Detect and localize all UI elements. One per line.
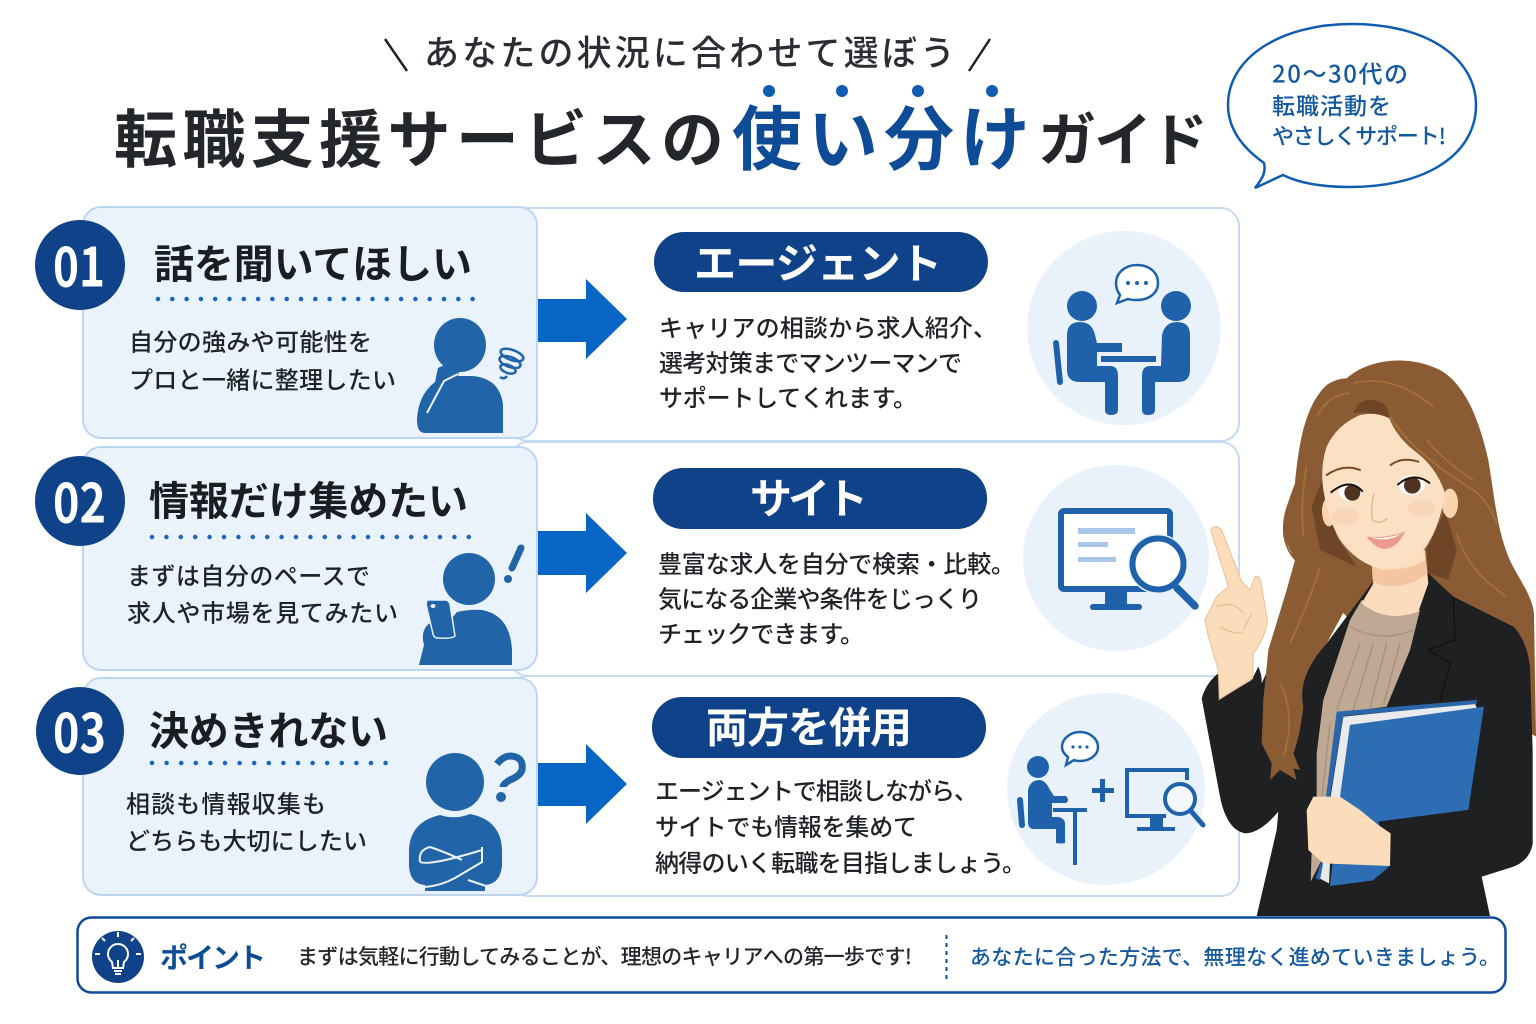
number badge 03 bbox=[36, 687, 124, 775]
holding hand bbox=[1307, 797, 1391, 866]
speech bubble bbox=[1228, 24, 1476, 188]
description bbox=[655, 778, 1026, 878]
hair left strand bbox=[1262, 483, 1373, 780]
icon: person with question mark bbox=[409, 753, 522, 891]
description: 求人や市場を見てみたい bbox=[127, 600, 398, 628]
heading: 情報だけ集めたい bbox=[149, 480, 468, 524]
description: 気になる企業や条件をじっくり bbox=[658, 586, 982, 614]
description bbox=[659, 316, 997, 412]
pointing hand bbox=[1205, 527, 1267, 699]
pill bbox=[654, 232, 988, 292]
speech bubble: 20～30代の bbox=[1272, 54, 1408, 90]
facial features bbox=[1327, 460, 1436, 549]
title: 転職支援サービスの bbox=[114, 106, 724, 176]
neck bbox=[1362, 550, 1428, 616]
description bbox=[129, 330, 396, 394]
face bbox=[1322, 414, 1445, 570]
subtitle: あなたの状況に合わせて選ぼう bbox=[424, 34, 955, 74]
description: 選考対策までマンツーマンで bbox=[659, 350, 962, 378]
point bar bbox=[78, 918, 1506, 992]
description bbox=[658, 552, 1015, 648]
panel: row 2 need bbox=[35, 447, 537, 670]
character: businesswoman with book bbox=[1202, 360, 1536, 916]
icon: consultation bbox=[1027, 231, 1221, 425]
speech bubble: 転職活動を bbox=[1272, 93, 1391, 119]
icon: thinking person bbox=[417, 318, 525, 433]
description bbox=[127, 564, 398, 628]
panel: row 3 service bbox=[652, 693, 1205, 885]
sweater bbox=[1311, 600, 1420, 882]
description: 豊富な求人を自分で検索・比較。 bbox=[658, 552, 1015, 578]
description: 相談も情報収集も bbox=[126, 792, 326, 818]
arrow 2 bbox=[538, 513, 627, 593]
description: サポートしてくれます。 bbox=[659, 386, 917, 412]
jacket shadow lines bbox=[1428, 597, 1455, 700]
description: キャリアの相談から求人紹介、 bbox=[659, 316, 997, 342]
pill bbox=[653, 468, 987, 529]
icon: both combined bbox=[1007, 693, 1205, 885]
pill: 両方を併用 bbox=[706, 704, 912, 752]
panel: row 2 service bbox=[653, 465, 1209, 651]
heading: 決めきれない bbox=[149, 710, 388, 754]
number badge 03: 03 bbox=[53, 690, 106, 768]
description: エージェントで相談しながら、 bbox=[655, 778, 978, 806]
book bbox=[1316, 700, 1484, 886]
message: まずは気軽に行動してみることが、理想のキャリアへの第一歩です! bbox=[297, 941, 912, 971]
description bbox=[126, 792, 367, 856]
jacket bbox=[1202, 573, 1533, 916]
title bbox=[114, 85, 1208, 179]
message: あなたに合った方法で、無理なく進めていきましょう。 bbox=[970, 946, 1500, 970]
number badge 01 bbox=[35, 220, 125, 310]
panel: row 3 need bbox=[36, 678, 537, 895]
description: どちらも大切にしたい bbox=[126, 828, 367, 856]
description: チェックできます。 bbox=[658, 622, 864, 648]
icon: light bulb bbox=[92, 931, 144, 983]
icon: person with phone bbox=[419, 548, 521, 665]
right sleeve bbox=[1373, 783, 1533, 889]
label: ポイント bbox=[160, 942, 266, 974]
ears bbox=[1322, 489, 1458, 526]
number badge 01: 01 bbox=[53, 224, 105, 302]
icon: monitor and magnifier bbox=[1023, 465, 1209, 651]
panel: row 1 need bbox=[35, 207, 537, 438]
description: 納得のいく転職を目指しましょう。 bbox=[655, 850, 1026, 878]
number badge 02: 02 bbox=[53, 460, 106, 538]
number badge 02 bbox=[35, 456, 125, 546]
description: 自分の強みや可能性を bbox=[129, 330, 372, 356]
hair back bbox=[1283, 360, 1536, 737]
panel: row 1 service bbox=[654, 231, 1221, 425]
title: ガイド bbox=[1038, 108, 1208, 174]
arrow 3 bbox=[538, 744, 627, 824]
hair highlights bbox=[1280, 381, 1507, 757]
pill: サイト bbox=[750, 476, 868, 522]
description: プロと一緒に整理したい bbox=[129, 368, 396, 394]
inner hair shadow bbox=[1312, 400, 1457, 580]
arrow 1 bbox=[538, 279, 627, 359]
thin hair strand bbox=[1284, 490, 1297, 561]
description: まずは自分のペースで bbox=[127, 564, 370, 590]
speech bubble: やさしくサポート! bbox=[1272, 119, 1446, 151]
pill bbox=[652, 697, 986, 758]
pill: エージェント bbox=[694, 240, 942, 288]
heading: 話を聞いてほしい bbox=[154, 243, 472, 287]
description: サイトでも情報を集めて bbox=[655, 814, 917, 842]
panel: row outlines bbox=[510, 208, 1239, 896]
title: 使い分け bbox=[732, 101, 1030, 179]
